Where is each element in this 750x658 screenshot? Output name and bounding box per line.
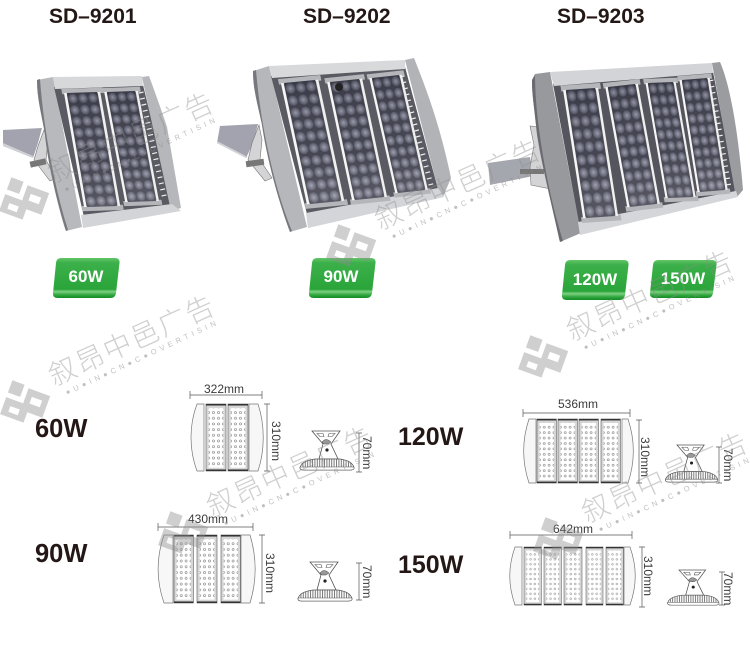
watermark 2: ●U●IN●CN●C●OVERTISIN	[390, 163, 543, 241]
watermark 2	[326, 133, 547, 272]
lamp photo: SD-9201	[3, 76, 181, 231]
watermark 2: 叙昂中邑广告	[370, 133, 547, 235]
LED panel 3	[643, 78, 699, 202]
mounting bracket	[488, 126, 556, 189]
dimension drawing: 120W	[523, 397, 735, 483]
top bar	[269, 60, 405, 78]
side view	[665, 445, 718, 482]
side view	[668, 570, 719, 605]
left side plate	[532, 72, 581, 242]
watermark 4: 叙昂中邑广告	[44, 289, 221, 391]
bottom bar	[81, 204, 181, 228]
LED panel 2	[324, 74, 391, 205]
title: SD-9201: SD–9201	[49, 5, 137, 28]
dark interior	[54, 85, 173, 217]
width dimension: 536mm	[558, 397, 598, 411]
LED panel 1	[61, 88, 124, 211]
dimension drawing: 90W	[158, 512, 374, 603]
label: 120W: 120W	[398, 423, 464, 451]
side view	[298, 562, 352, 601]
watermark 5	[158, 420, 379, 559]
front view	[524, 419, 633, 483]
depth dimension: 70mm	[721, 448, 735, 481]
LED panel 1	[278, 75, 348, 209]
height dimension: 310mm	[638, 437, 652, 477]
badge: 60W: 60W	[69, 267, 104, 286]
mounting bracket	[217, 124, 272, 181]
LED panel 2	[603, 79, 663, 212]
watermark 1	[0, 86, 220, 225]
lamp photo: SD-9202	[217, 58, 451, 232]
dimension drawing: 60W	[190, 382, 374, 472]
width dimension: 430mm	[188, 512, 228, 526]
height dimension	[639, 547, 655, 607]
sensor	[335, 83, 343, 91]
width dimension: 322mm	[204, 382, 244, 396]
right side plate	[712, 62, 743, 197]
watermark 6	[533, 426, 750, 565]
front view	[510, 547, 635, 605]
label: 60W: 60W	[35, 415, 88, 443]
badge: 120W	[562, 260, 629, 300]
dimension drawing: 150W	[510, 522, 735, 607]
side view	[300, 431, 354, 470]
watermark 3	[518, 244, 739, 383]
depth dimension: 70mm	[721, 572, 735, 605]
lamp photo: SD-9203	[488, 62, 743, 242]
front view	[158, 535, 255, 603]
dark interior	[271, 67, 438, 214]
label: 90W: 90W	[35, 540, 88, 568]
watermark 6: ●U●IN●CN●C●OVERTISIN	[597, 456, 750, 534]
right side plate	[142, 76, 181, 211]
watermark 4	[0, 289, 221, 428]
badge: 60W	[53, 258, 120, 298]
LED panel 3	[367, 70, 431, 198]
cooling fins	[402, 76, 431, 185]
watermark 6: 叙昂中邑广告	[577, 426, 750, 528]
depth dimension: 70mm	[360, 565, 374, 598]
title: SD-9202: SD–9202	[303, 5, 391, 28]
cooling fins	[711, 80, 729, 186]
front view	[191, 404, 263, 471]
bottom bar	[306, 188, 444, 228]
watermark 1: ●U●IN●CN●C●OVERTISIN	[63, 116, 216, 194]
width dimension	[523, 397, 630, 417]
top bar	[53, 76, 143, 89]
watermark 5: 叙昂中邑广告	[202, 420, 379, 522]
badge: 90W	[309, 258, 376, 298]
label: 150W: 150W	[398, 551, 464, 579]
bottom bar	[578, 191, 738, 235]
width dimension	[158, 512, 253, 531]
cooling fins	[141, 92, 165, 200]
height dimension	[259, 535, 277, 603]
depth dimension	[716, 447, 735, 483]
height dimension	[636, 420, 652, 483]
title: SD-9203: SD–9203	[557, 5, 645, 28]
watermark 1: 叙昂中邑广告	[43, 86, 220, 188]
watermark 3: 叙昂中邑广告	[562, 244, 739, 346]
width dimension	[510, 522, 632, 539]
badge: 150W	[650, 260, 717, 298]
LED panel 2	[102, 87, 162, 206]
mounting bracket	[3, 128, 56, 181]
height dimension: 310mm	[269, 421, 283, 461]
depth dimension	[356, 433, 374, 472]
top bar	[550, 63, 713, 86]
right side plate	[405, 58, 451, 197]
depth dimension: 70mm	[360, 436, 374, 469]
badge: 120W: 120W	[573, 270, 618, 289]
LED panel 4	[677, 74, 731, 196]
badge: 150W: 150W	[661, 269, 706, 288]
LED panel 1	[560, 83, 622, 223]
width dimension	[190, 382, 262, 399]
badge: 90W: 90W	[324, 267, 359, 286]
watermark 5: ●U●IN●CN●C●OVERTISIN	[222, 450, 375, 528]
left side plate	[253, 66, 307, 232]
dark interior	[553, 72, 736, 223]
width dimension: 642mm	[553, 522, 593, 536]
height dimension	[264, 404, 283, 471]
left side plate	[37, 77, 82, 231]
watermark 3: ●U●IN●CN●C●OVERTISIN	[582, 274, 735, 352]
watermark 4: ●U●IN●CN●C●OVERTISIN	[64, 319, 217, 397]
height dimension: 310mm	[263, 553, 277, 593]
height dimension: 310mm	[641, 556, 655, 596]
